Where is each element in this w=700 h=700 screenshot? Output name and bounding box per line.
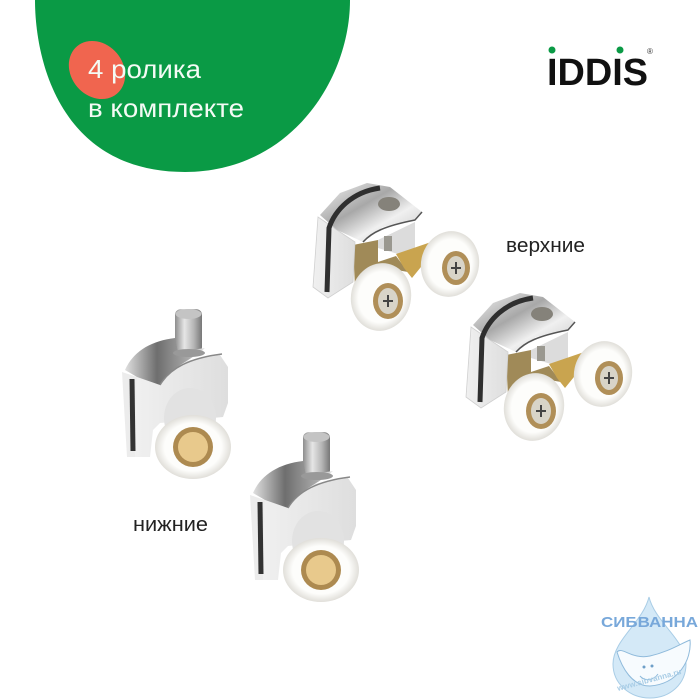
label: upper rollers: верхние <box>506 235 585 257</box>
coral accent blob <box>57 30 137 110</box>
lower roller 1 <box>122 309 231 479</box>
watermark: Сибванна drop logo: СИБВАННА <box>601 614 698 631</box>
IDDIS logo: ® <box>647 47 653 56</box>
heading text <box>88 54 244 123</box>
heading text: 4 ролика <box>88 54 202 84</box>
lower roller 2 <box>250 432 359 602</box>
watermark: Сибванна drop logo: www.sibvanna.ru <box>615 667 682 693</box>
upper roller 2 <box>466 293 638 446</box>
heading text: в комплекте <box>88 93 244 123</box>
upper roller 1 <box>313 183 485 336</box>
green heading blob <box>35 0 350 172</box>
watermark: Сибванна drop logo <box>601 597 698 698</box>
IDDIS logo: IDDIS <box>547 52 648 94</box>
label: lower rollers: нижние <box>133 514 208 536</box>
